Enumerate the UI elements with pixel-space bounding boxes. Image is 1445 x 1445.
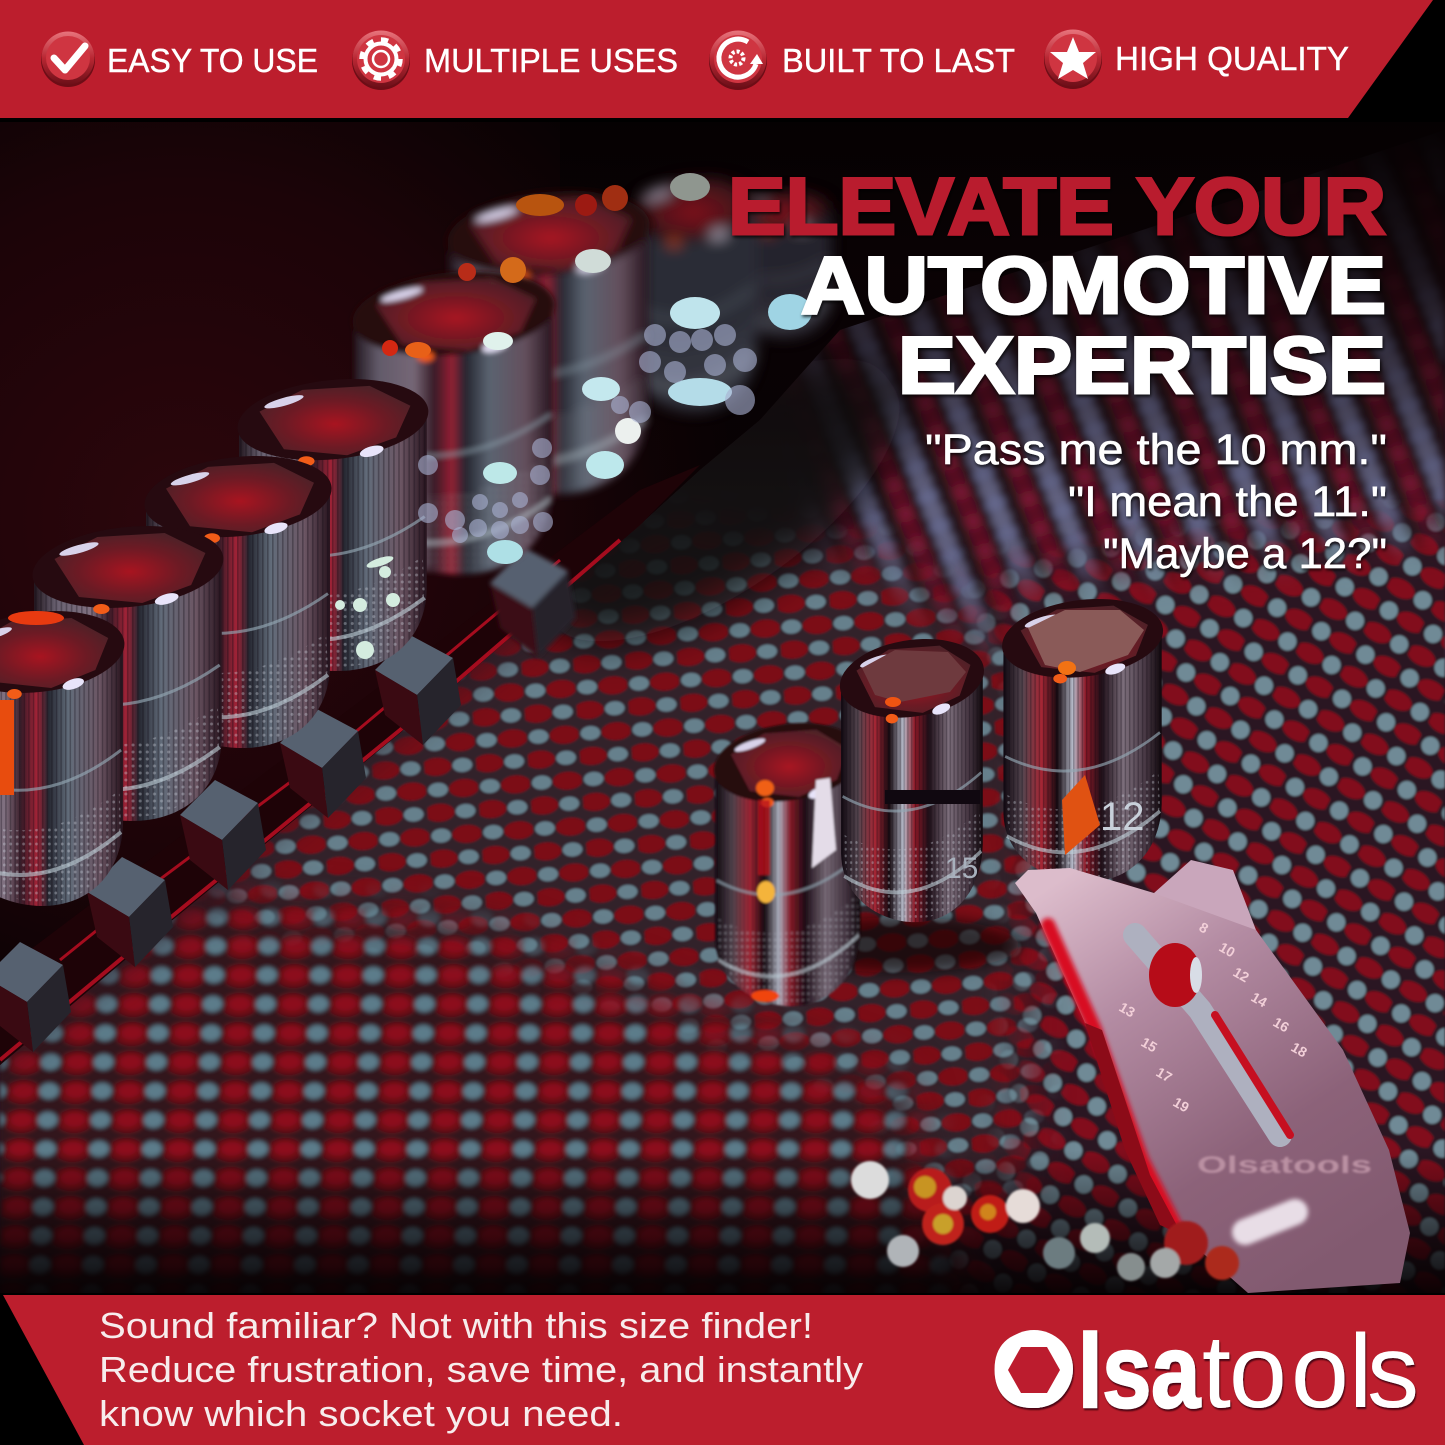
rail socket 1 bbox=[0, 602, 128, 906]
rail socket 5 bbox=[348, 262, 559, 575]
icon: star badge bbox=[1044, 30, 1102, 89]
photo: top darkening of the mat bbox=[560, 118, 1445, 498]
rail socket 6 bbox=[443, 182, 654, 495]
feature: built to last bbox=[709, 30, 1015, 90]
rail socket 3 bbox=[140, 447, 336, 748]
gauge slot bbox=[1135, 935, 1280, 1135]
loose socket right: 12 bbox=[1100, 795, 1144, 839]
gauge scale numbers: 19 bbox=[1170, 1094, 1192, 1115]
gauge scale numbers: 10 bbox=[1216, 939, 1238, 960]
heading line: expertise: EXPERTISE bbox=[898, 321, 1386, 411]
size finder gauge tool bbox=[1015, 860, 1410, 1293]
gauge scale numbers: 17 bbox=[1154, 1064, 1175, 1085]
feature: high quality: HIGH QUALITY bbox=[1115, 40, 1349, 77]
gauge scale numbers: 15 bbox=[1138, 1034, 1160, 1055]
gauge scale numbers: 8 bbox=[1196, 919, 1211, 937]
loose socket middle: 15 bbox=[945, 852, 978, 885]
gauge scale numbers: 12 bbox=[1230, 964, 1252, 985]
icon: check badge bbox=[41, 32, 95, 87]
red glow edge of gauge bbox=[1048, 925, 1180, 1235]
gauge scale numbers: 16 bbox=[1270, 1014, 1292, 1035]
heading line: elevate your: ELEVATE YOUR bbox=[728, 162, 1386, 252]
footer description text: Sound familiar? Not with this size finder! bbox=[99, 1305, 813, 1346]
feature: easy to use bbox=[41, 32, 318, 87]
logo: Olsatools bbox=[990, 1309, 1419, 1430]
heading bbox=[728, 162, 1386, 411]
loose socket right bbox=[999, 591, 1167, 882]
rail socket 4 bbox=[233, 370, 433, 671]
photo: blurred foreground fade at bottom bbox=[0, 1150, 1445, 1296]
gauge scale numbers: 18 bbox=[1288, 1039, 1310, 1060]
quote text block bbox=[925, 426, 1387, 578]
feature: multiple uses: MULTIPLE USES bbox=[424, 42, 678, 79]
quote text block: "I mean the 11." bbox=[1068, 478, 1387, 526]
icon: gear badge bbox=[352, 30, 410, 90]
quote text block: "Maybe a 12?" bbox=[1103, 530, 1387, 578]
rail socket 2 bbox=[28, 517, 228, 821]
feature: high quality bbox=[1044, 30, 1349, 89]
logo: Olsatools: tools bbox=[1202, 1314, 1419, 1430]
loose socket middle bbox=[837, 631, 987, 922]
footer description text: know which socket you need. bbox=[99, 1393, 623, 1434]
gauge scale numbers: 13 bbox=[1116, 999, 1138, 1020]
rail clips bbox=[0, 548, 576, 1052]
footer description text bbox=[99, 1305, 863, 1434]
bokeh highlights on far sockets bbox=[335, 173, 812, 659]
footer band bbox=[0, 1293, 1445, 1445]
far rail sockets, out of focus bbox=[624, 169, 835, 412]
logo: Olsatools: lsa bbox=[1078, 1314, 1201, 1430]
feature: multiple uses bbox=[352, 30, 678, 90]
loose socket left (out of focus) bbox=[711, 715, 865, 1006]
gauge bottom notch bbox=[1245, 1212, 1295, 1232]
header band bbox=[0, 0, 1445, 122]
foreground bokeh beads bbox=[851, 1161, 1239, 1281]
gauge brand mark: Olsatools bbox=[1197, 1152, 1372, 1179]
feature: easy to use: EASY TO USE bbox=[107, 42, 318, 79]
socket rail bbox=[0, 465, 700, 1065]
indicator pin bbox=[1149, 943, 1201, 1007]
quote text block: "Pass me the 10 mm." bbox=[925, 426, 1387, 474]
gauge scale numbers bbox=[1116, 919, 1310, 1115]
footer description text: Reduce frustration, save time, and instantly bbox=[99, 1349, 863, 1390]
heading line: automotive: AUTOMOTIVE bbox=[801, 241, 1386, 331]
gauge scale numbers: 14 bbox=[1248, 989, 1270, 1010]
feature: built to last: BUILT TO LAST bbox=[782, 42, 1015, 79]
icon: circular arrow with gear badge bbox=[709, 30, 767, 90]
logo: Olsatools: O bbox=[990, 1309, 1076, 1430]
